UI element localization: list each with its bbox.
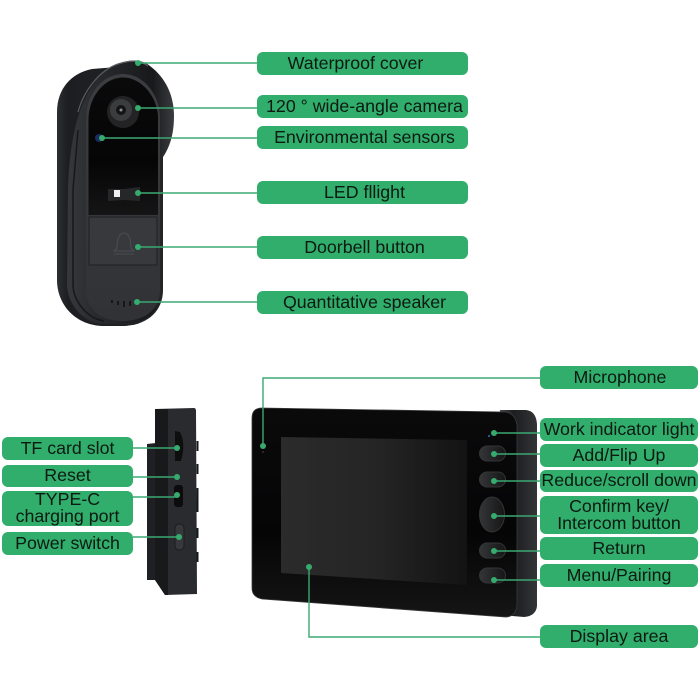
- TF card slot: [175, 431, 183, 461]
- label: Power switch: [2, 532, 133, 555]
- monitor face: [252, 408, 517, 617]
- label: LED flight: LED fllight: [324, 182, 405, 202]
- label: Microphone: [540, 366, 698, 389]
- doorbell face: [86, 74, 160, 321]
- label: TF card slot: [2, 437, 133, 460]
- doorbell back shell: [57, 66, 163, 326]
- sensor: [95, 134, 103, 142]
- side body: [155, 408, 197, 595]
- label: Return: [540, 537, 698, 560]
- label: TYPE-C charging port: [2, 491, 133, 526]
- label: LED flight: [257, 181, 468, 204]
- label: Confirm key/Intercom button: [540, 496, 698, 534]
- display: [281, 437, 467, 585]
- label: Menu/Pairing: Menu/Pairing: [567, 564, 671, 584]
- glass panel: [88, 78, 158, 215]
- USB-C port: [174, 485, 183, 507]
- label: Power switch: Power switch: [15, 532, 120, 552]
- mic hole: [262, 451, 264, 453]
- label: TYPE-C charging port: charging port: [16, 506, 119, 526]
- label: Waterproof cover: [257, 52, 468, 75]
- label: Doorbell button: Doorbell button: [304, 236, 425, 256]
- camera lens: [107, 96, 139, 128]
- leader lines: [102, 63, 540, 637]
- label: Quantitative speaker: Quantitative speaker: [283, 292, 446, 312]
- label: Display area: Display area: [570, 626, 668, 646]
- label: Add/Flip Up: [540, 444, 698, 467]
- side back shell: [147, 443, 156, 580]
- reset hole: [175, 475, 179, 479]
- label: TF card slot: TF card slot: [21, 438, 114, 458]
- LED flashlight: [108, 187, 140, 201]
- label: Environmental sensors: Environmental sensors: [274, 126, 455, 146]
- label: Add/Flip Up: Add/Flip Up: [573, 444, 665, 464]
- label: Display area: [540, 625, 698, 648]
- label: TYPE-C charging port: TYPE-C: [35, 489, 100, 509]
- label: Confirm key/Intercom button: Confirm key/: [569, 496, 669, 516]
- label: Doorbell button: [257, 236, 468, 259]
- label: Waterproof cover: Waterproof cover: [288, 52, 423, 72]
- label: 120° wide-angle camera: 120 ° wide-angle camera: [266, 96, 463, 116]
- front view of monitor: [252, 408, 537, 617]
- label: Reset: Reset: [44, 465, 91, 485]
- monitor rear edge: [500, 410, 537, 617]
- label: Work indicator light: Work indicator light: [544, 418, 694, 438]
- label: Confirm key/Intercom button: Intercom button: [557, 512, 681, 532]
- doorbell button: [89, 217, 157, 265]
- label: Reduce/scroll down: Reduce/scroll down: [541, 470, 697, 490]
- label: Menu/Pairing: [540, 564, 698, 587]
- monitor buttons: [480, 446, 506, 583]
- side buttons: [196, 441, 198, 562]
- power switch: [175, 524, 184, 550]
- indicator: [488, 435, 490, 437]
- leader dots: [99, 60, 497, 583]
- side view of monitor: [147, 408, 198, 595]
- label: Return: Return: [592, 538, 646, 558]
- label: Reset: [2, 465, 133, 487]
- speaker holes: [112, 300, 136, 307]
- label: Quantitative speaker: [257, 291, 468, 314]
- label: Microphone: Microphone: [574, 366, 666, 386]
- doorbell device: [57, 61, 174, 326]
- waterproof cover hood: [67, 61, 174, 324]
